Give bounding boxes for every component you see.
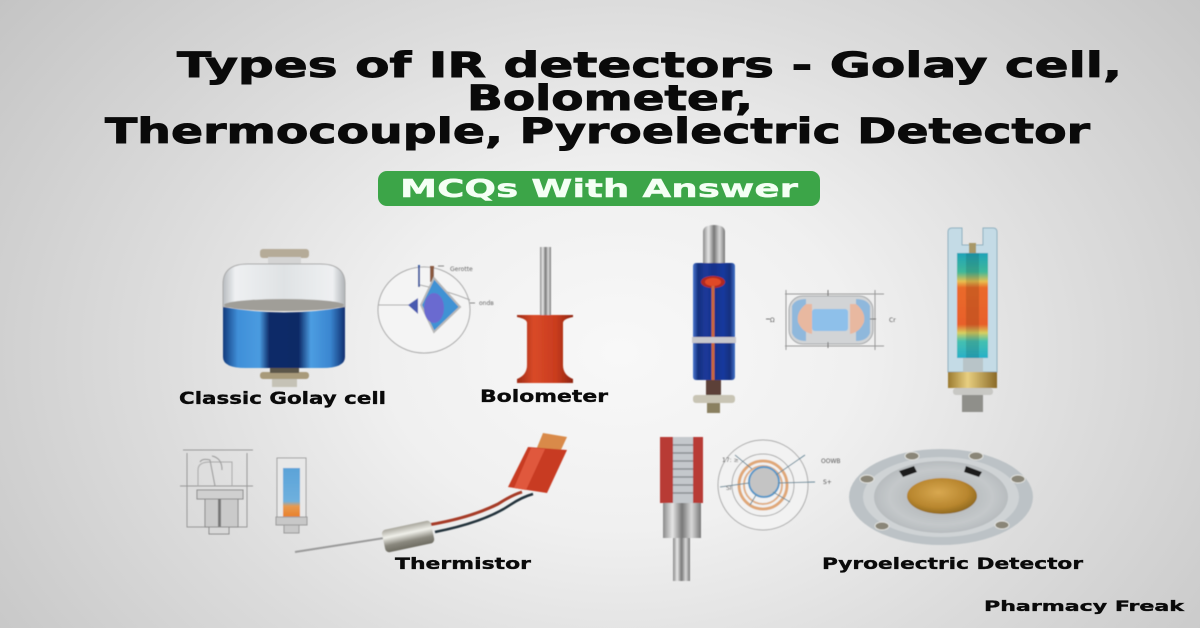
icon: thermistor <box>295 433 567 553</box>
icon: pyroelectric detector <box>849 449 1033 545</box>
badge: MCQs With Answer <box>378 171 820 206</box>
diagram: Golay schematic: Gerotte <box>450 266 473 273</box>
title: Bolometer, <box>467 79 753 119</box>
diagram: Golay schematic <box>378 265 494 353</box>
diagram: concentric rings: OOWB <box>821 458 840 465</box>
icon: red coil probe <box>660 437 703 581</box>
icon: small blue tube <box>276 458 307 533</box>
icon: gradient tube detector <box>948 228 997 412</box>
diagram: concentric rings: S+ <box>823 479 832 486</box>
diagram: pencil schematic <box>180 450 253 534</box>
title: Thermocouple, Pyroelectric Detector <box>105 112 1091 152</box>
badge: MCQs With Answer: MCQs With Answer <box>400 174 799 203</box>
label: Classic Golay cell: Classic Golay cell <box>179 389 386 409</box>
diagram: concentric rings <box>718 440 840 530</box>
label: Pharmacy Freak: Pharmacy Freak <box>984 599 1185 615</box>
diagram: cross section: Ω <box>770 317 775 324</box>
title <box>105 46 1122 152</box>
title: Types of IR detectors - Golay cell, <box>177 46 1122 86</box>
diagram: concentric rings: SI <box>726 485 732 492</box>
label: Pyroelectric Detector: Pyroelectric Detector <box>822 554 1083 573</box>
label: Bolometer: Bolometer <box>480 387 609 407</box>
icon: classic Golay cell <box>223 249 345 387</box>
diagram: cross section <box>766 290 896 350</box>
diagram: Golay schematic: ondв <box>479 300 494 307</box>
label: Thermistor: Thermistor <box>395 554 531 573</box>
diagram: cross section: Cr <box>889 317 896 324</box>
icon: bolometer <box>517 247 573 383</box>
icon: blue tube detector <box>692 225 736 413</box>
diagram: concentric rings: 17: ≥ <box>722 457 739 464</box>
